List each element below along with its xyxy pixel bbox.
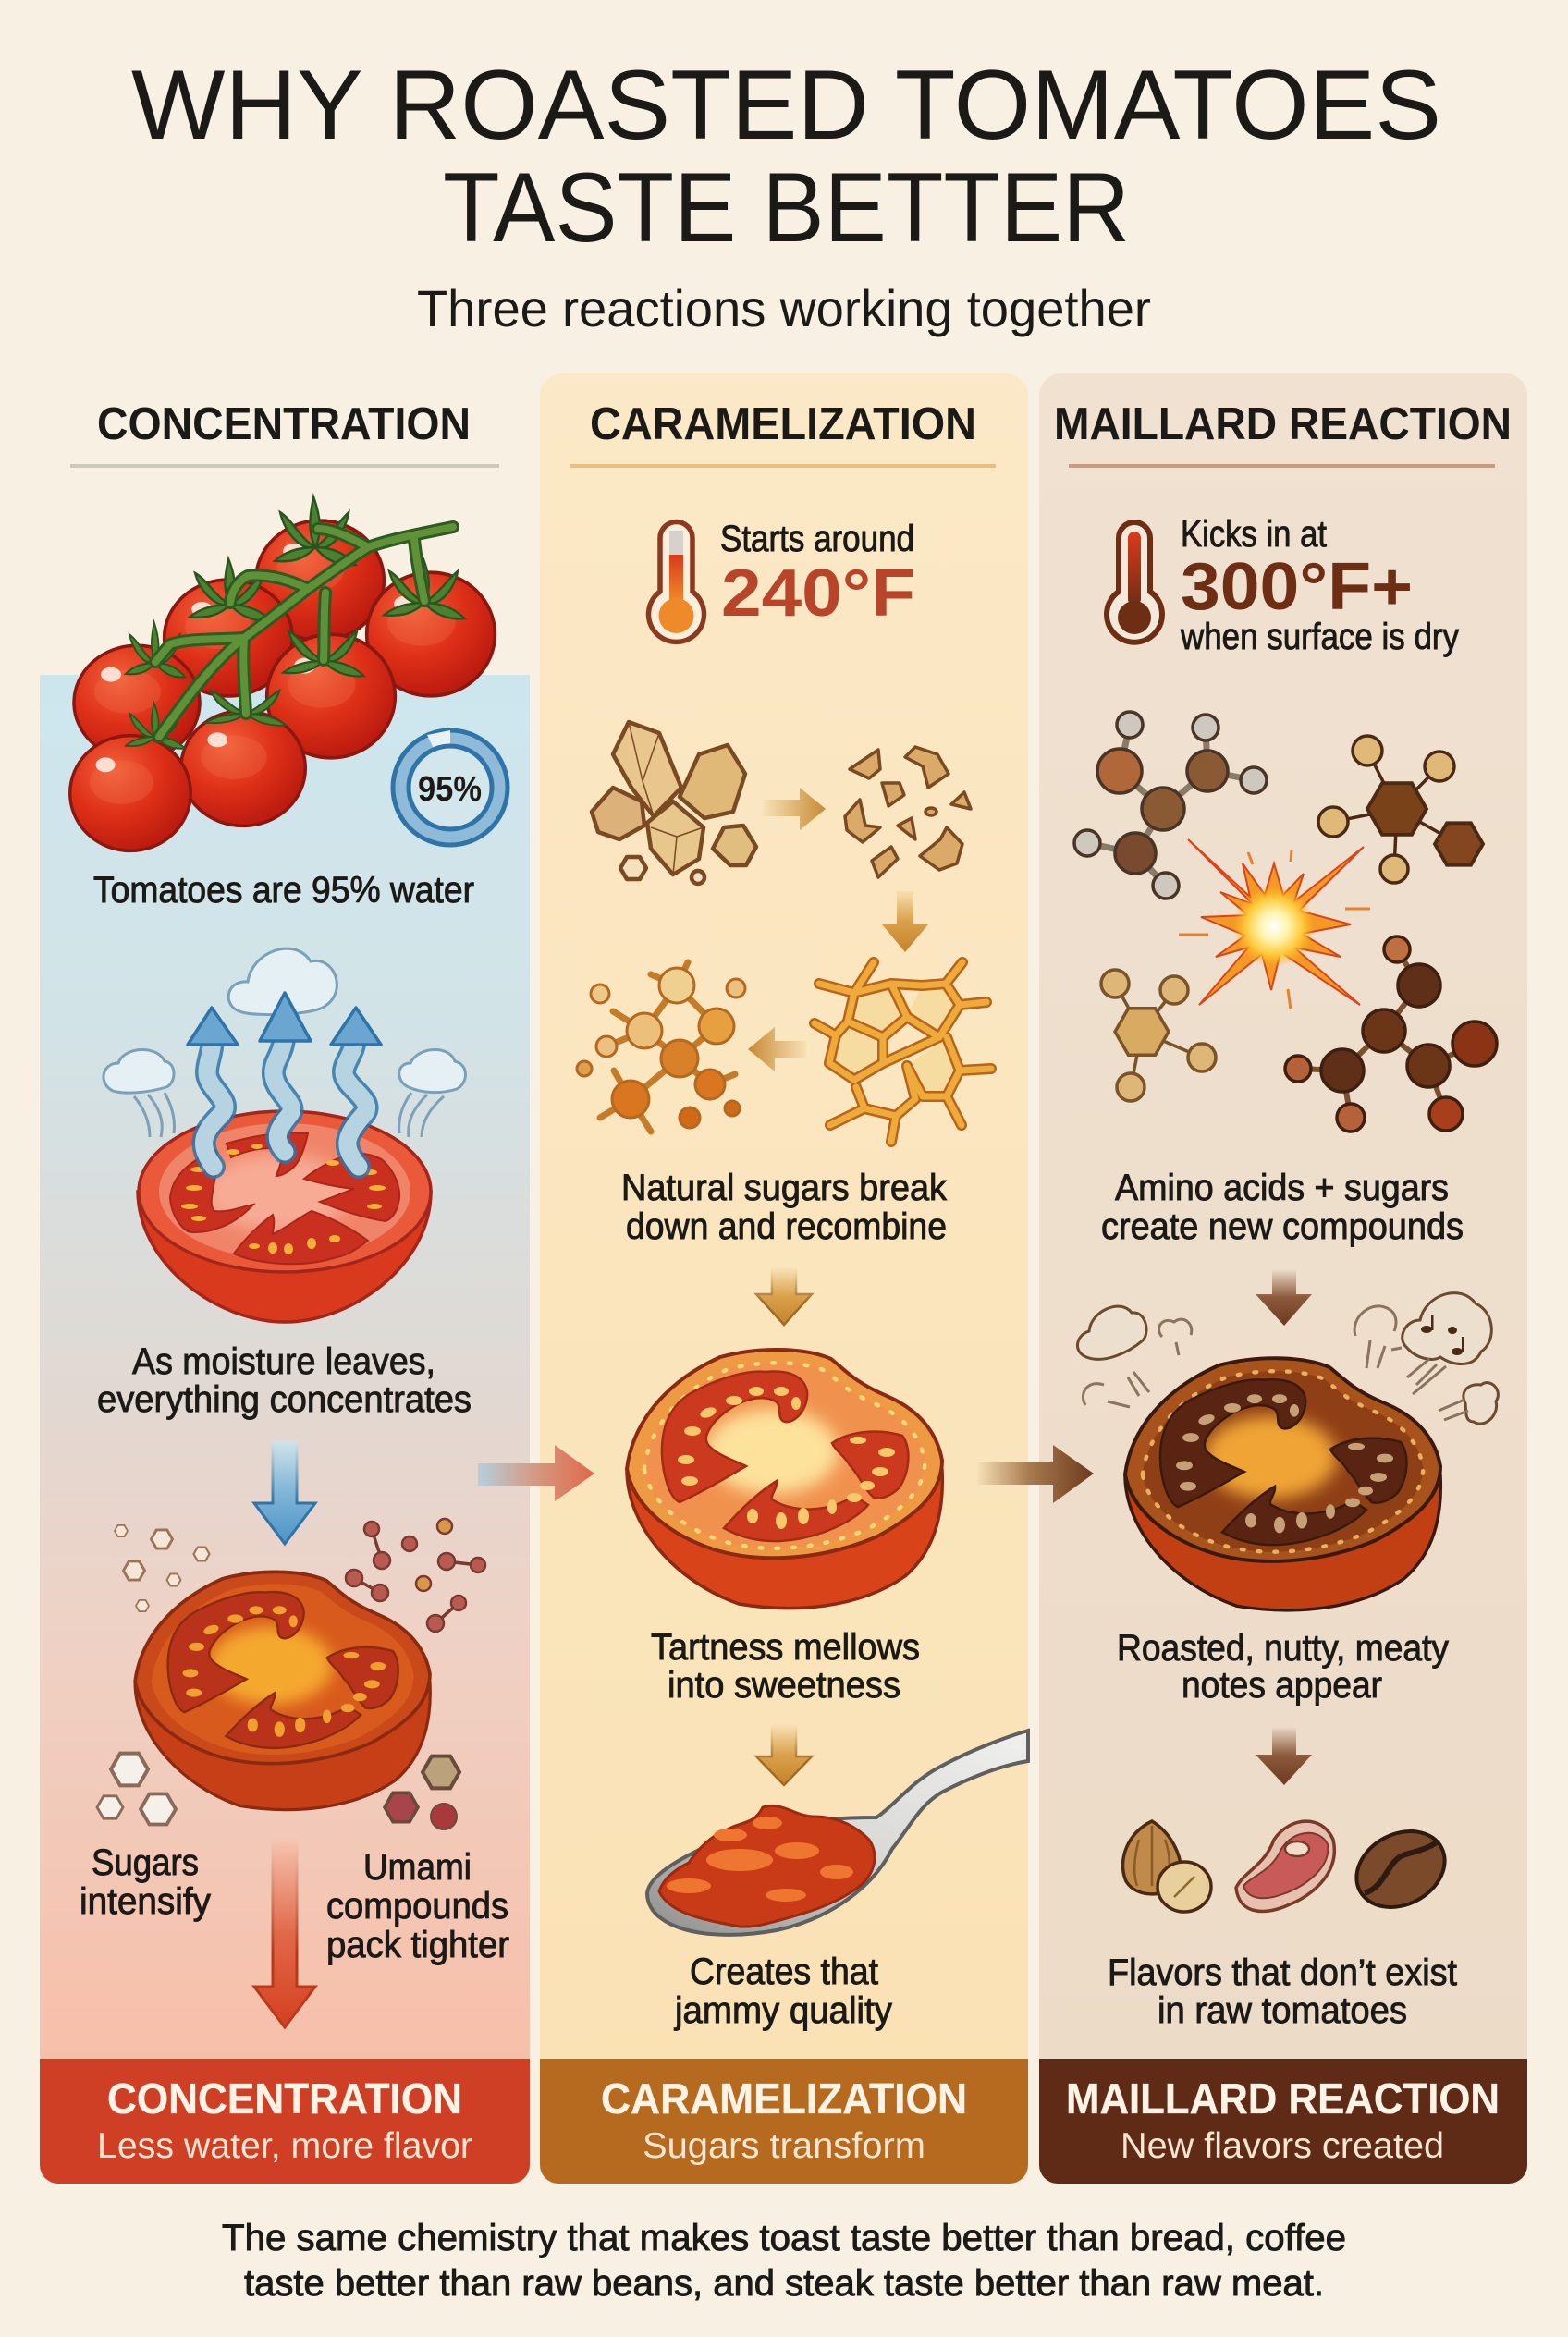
icon: dark molecule <box>1285 936 1497 1132</box>
text: sugars intensify: intensify <box>80 1881 211 1922</box>
text: as moisture leaves <box>97 1341 472 1420</box>
icon: aroma puffs <box>1077 1293 1498 1424</box>
arrow: concentration to caramelization <box>478 1445 594 1501</box>
text: amino acids: create new compounds <box>1101 1206 1464 1247</box>
text: creates jammy <box>674 1952 892 2031</box>
title <box>131 49 1441 263</box>
icon: beige molecule <box>1101 970 1216 1101</box>
arrow: maillard down 2 <box>1256 1726 1312 1785</box>
banner: concentration: Less water, more flavor <box>97 2126 472 2166</box>
panel: caramelization background <box>540 373 1028 2071</box>
title: TASTE BETTER <box>443 152 1130 263</box>
icon: sugar crystals <box>592 722 756 884</box>
icon: maillard browned slice <box>1125 1358 1440 1610</box>
banner: maillard reaction <box>1039 2059 1527 2184</box>
icon: sugar particles <box>115 1525 209 1611</box>
icon: thermometer maillard <box>1107 522 1162 642</box>
heading: maillard reaction <box>1054 399 1512 468</box>
heading: concentration <box>70 399 499 468</box>
icon: crystal fragments <box>845 747 971 877</box>
text: flavors <box>1108 1952 1457 2031</box>
icon: caramel network <box>815 962 991 1142</box>
text: tartness mellows: into sweetness <box>668 1665 900 1706</box>
text: creates jammy: Creates that <box>690 1952 878 1992</box>
arrow: caramel down 2 <box>756 1726 812 1785</box>
text: umami compounds: Umami <box>363 1847 472 1888</box>
arrow: caramelization to maillard <box>977 1445 1094 1503</box>
icon: umami particles <box>346 1519 485 1632</box>
icon: amino acid molecule <box>1074 712 1267 899</box>
text: umami compounds: compounds <box>326 1886 508 1927</box>
arrow: caramel down 1 <box>756 1269 812 1325</box>
text: natural sugars: down and recombine <box>626 1206 947 1247</box>
text: umami compounds: pack tighter <box>326 1925 509 1965</box>
arrow: blue down <box>254 1442 315 1544</box>
text: flavors: Flavors that don’t exist <box>1108 1952 1457 1993</box>
text: as moisture leaves: everything concentrates <box>97 1379 472 1420</box>
banner: caramelization: CARAMELIZATION <box>601 2074 967 2123</box>
text: kicks in at 300F: 300°F+ <box>1181 550 1413 624</box>
banner: maillard reaction: MAILLARD REACTION <box>1066 2074 1500 2123</box>
text: tartness mellows <box>651 1627 920 1706</box>
text: roasted notes <box>1117 1628 1449 1706</box>
icon: wavy rising steam arrows <box>188 993 381 1167</box>
icon: umami crystals <box>385 1756 459 1829</box>
icon: recombined molecules <box>577 962 745 1132</box>
banner: caramelization: Sugars transform <box>643 2126 925 2166</box>
banner: maillard reaction: New flavors created <box>1121 2126 1444 2166</box>
heading: maillard reaction: MAILLARD REACTION <box>1054 399 1512 449</box>
banner: concentration: CONCENTRATION <box>107 2074 462 2123</box>
text: tomatoes are 95% water: Tomatoes are 95% water <box>93 870 474 911</box>
icon: brown molecule <box>1318 736 1483 883</box>
banner: concentration <box>40 2059 530 2184</box>
heading: caramelization <box>570 399 996 468</box>
text: as moisture leaves: As moisture leaves, <box>132 1341 435 1382</box>
icon: caramelized tomato slice <box>627 1350 942 1609</box>
text: tartness mellows: Tartness mellows <box>651 1627 920 1668</box>
subtitle: Three reactions working together <box>417 279 1151 337</box>
icon: fresh tomato slice <box>138 1111 431 1322</box>
text: sugars intensify <box>80 1842 211 1922</box>
heading: concentration: CONCENTRATION <box>97 399 471 449</box>
text: creates jammy: jammy quality <box>674 1990 892 2031</box>
icon: sugar crystals <box>97 1754 176 1825</box>
icon: steam clouds <box>104 948 465 1137</box>
text: kicks in at 300F: Kicks in at <box>1181 514 1327 555</box>
text: amino acids <box>1101 1168 1464 1247</box>
title: WHY ROASTED TOMATOES <box>131 49 1441 160</box>
text: natural sugars: Natural sugars break <box>621 1168 948 1208</box>
icon: reaction burst <box>1179 839 1370 1009</box>
footer text: taste better than raw beans, and steak taste better than raw meat. <box>244 2263 1324 2304</box>
footer text: The same chemistry that makes toast taste better than bread, coffee <box>222 2218 1346 2258</box>
text: amino acids: Amino acids + sugars <box>1115 1168 1449 1208</box>
icon: spoon with tomato jam <box>647 1731 1028 1935</box>
icon: hazelnut <box>1122 1821 1211 1912</box>
heading: caramelization: CARAMELIZATION <box>590 399 976 449</box>
text: flavors: in raw tomatoes <box>1158 1990 1407 2031</box>
arrow: red down <box>254 1841 315 2027</box>
text: kicks in at 300F: when surface is dry <box>1180 617 1459 657</box>
arrow: maillard down 1 <box>1256 1269 1312 1326</box>
banner: caramelization <box>540 2059 1028 2184</box>
icon: 95 percent water ring: 95% <box>418 770 482 809</box>
text: roasted notes: Roasted, nutty, meaty <box>1117 1628 1449 1669</box>
icon: steak <box>1236 1821 1334 1911</box>
text: umami compounds <box>326 1847 509 1965</box>
icon: tomatoes on the vine <box>70 496 495 850</box>
text: starts around 240F: 240°F <box>721 557 915 630</box>
text: roasted notes: notes appear <box>1182 1665 1382 1706</box>
arrow: to fragments <box>763 788 826 830</box>
text: kicks in at 300F <box>1180 514 1459 657</box>
text: starts around 240F <box>720 519 915 630</box>
icon: thermometer caramelization <box>649 522 704 642</box>
text: sugars intensify: Sugars <box>92 1842 199 1883</box>
arrow: network to molecules <box>748 1027 807 1071</box>
icon: 95 percent water ring <box>393 730 508 845</box>
footer text <box>222 2218 1346 2304</box>
arrow: fragments down to network <box>882 891 928 952</box>
panel: maillard background <box>1039 373 1527 2071</box>
text: natural sugars <box>621 1168 948 1247</box>
panel: concentration background <box>40 675 530 2062</box>
icon: dried tomato slice <box>135 1572 430 1810</box>
icon: coffee bean <box>1343 1817 1458 1922</box>
text: starts around 240F: Starts around <box>720 519 914 559</box>
